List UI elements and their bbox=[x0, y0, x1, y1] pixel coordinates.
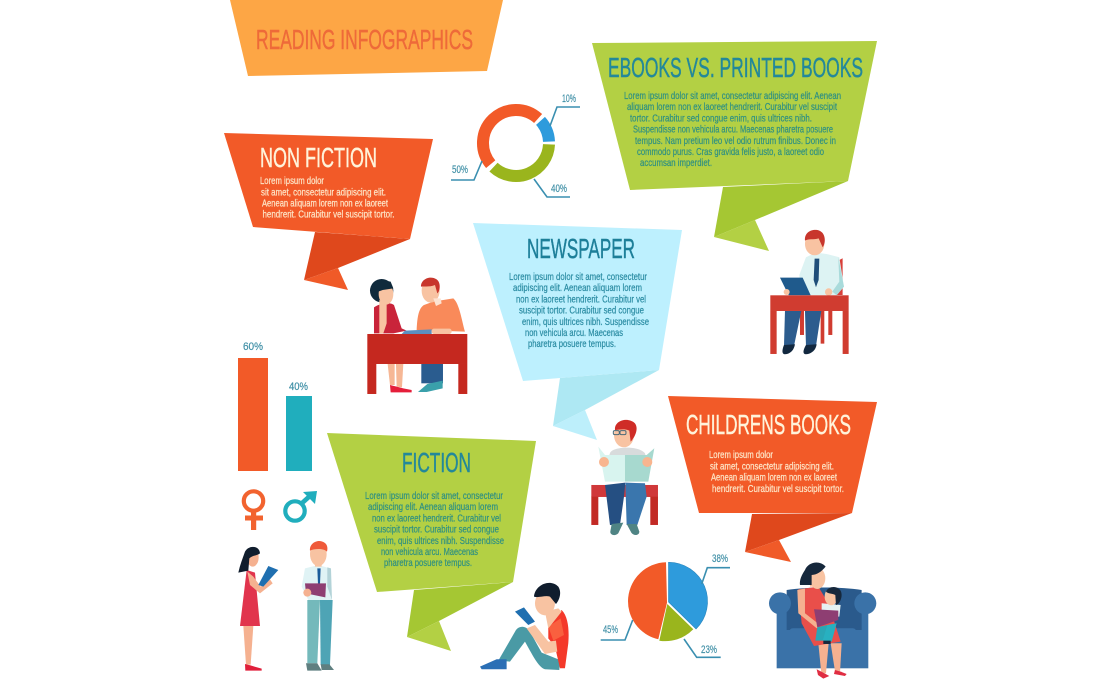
title banner: READING INFOGRAPHICS bbox=[256, 24, 473, 55]
bar chart: gender split: 60% bbox=[243, 341, 263, 353]
panel: childrens books: CHILDRENS BOOKS bbox=[686, 409, 851, 440]
panel: childrens books bbox=[668, 396, 877, 562]
panel: newspaper: enim, quis ultrices nibh. Suspendisse bbox=[522, 317, 649, 328]
panel: ebooks vs printed books bbox=[592, 41, 877, 251]
panel: ebooks vs printed books: aliquam lorem non ex laoreet hendrerit. Curabitur vel suscipit bbox=[627, 102, 837, 113]
figure: man with laptop at desk bbox=[770, 230, 849, 354]
panel: newspaper: non vehicula arcu. Maecenas bbox=[525, 328, 623, 339]
panel: childrens books: hendrerit. Curabitur vel suscipit tortor. bbox=[712, 484, 844, 495]
panel: fiction: suscipit tortor. Curabitur sed congue bbox=[374, 525, 499, 536]
panel: fiction: FICTION bbox=[402, 447, 471, 478]
panel: fiction: Lorem ipsum dolor sit amet, consectetur bbox=[365, 491, 503, 502]
panel: non fiction: hendrerit. Curabitur vel suscipit tortor. bbox=[262, 210, 394, 220]
donut chart: 10% bbox=[562, 93, 576, 105]
bar chart: gender split: 40% bbox=[289, 381, 308, 393]
panel: newspaper: adipiscing elit. Aenean aliquam lorem bbox=[513, 283, 642, 294]
panel: newspaper: non ex laoreet hendrerit. Curabitur vel bbox=[516, 294, 646, 305]
panel: ebooks vs printed books: Lorem ipsum dolor sit amet, consectetur adipiscing elit. Aenean bbox=[624, 91, 841, 102]
pie chart bbox=[601, 553, 730, 657]
donut chart: 50% bbox=[452, 164, 468, 176]
title banner bbox=[230, 0, 503, 76]
panel: childrens books: sit amet, consectetur adipiscing elit. bbox=[710, 462, 834, 472]
figure: woman and man standing with books bbox=[238, 541, 334, 671]
icon: male symbol bbox=[285, 491, 317, 521]
figure: man reading newspaper on bench bbox=[591, 420, 658, 535]
panel: ebooks vs printed books: tortor. Curabitur sed congue enim, quis ultrices nibh. bbox=[630, 113, 812, 124]
panel: fiction: adipiscing elit. Aenean aliquam lorem bbox=[368, 502, 498, 513]
bar chart: gender split bbox=[238, 341, 312, 471]
donut chart bbox=[451, 93, 580, 197]
panel: ebooks vs printed books: tempus. Nam pretium leo vel odio rutrum finibus. Donec in bbox=[635, 136, 836, 147]
panel: newspaper: suscipit tortor. Curabitur sed congue bbox=[519, 306, 644, 317]
panel: ebooks vs printed books: Suspendisse non vehicula arcu. Maecenas pharetra posuere bbox=[633, 125, 833, 136]
icon: female symbol bbox=[244, 491, 263, 530]
panel: ebooks vs printed books: commodo purus. Cras gravida felis justo, a laoreet odio bbox=[637, 147, 824, 158]
panel: newspaper: Lorem ipsum dolor sit amet, consectetur bbox=[509, 272, 647, 283]
panel: fiction: non ex laoreet hendrerit. Curabitur vel bbox=[372, 513, 501, 524]
panel: ebooks vs printed books: EBOOKS VS. PRINTED BOOKS bbox=[608, 52, 863, 83]
panel: newspaper: NEWSPAPER bbox=[527, 233, 635, 264]
panel: non fiction: NON FICTION bbox=[260, 142, 377, 173]
panel: non fiction: Lorem ipsum dolor bbox=[260, 176, 324, 187]
panel: newspaper bbox=[473, 223, 682, 440]
panel: non fiction bbox=[224, 133, 433, 290]
panel: childrens books: Aenean aliquam lorem non ex laoreet bbox=[711, 472, 837, 484]
panel: fiction bbox=[327, 433, 536, 651]
figure: mother reading to child in armchair bbox=[769, 563, 876, 679]
figure: couple reading at table bbox=[367, 278, 467, 394]
panel: childrens books: Lorem ipsum dolor bbox=[709, 450, 773, 461]
donut chart: 40% bbox=[551, 183, 567, 195]
panel: non fiction: sit amet, consectetur adipiscing elit. bbox=[261, 188, 386, 198]
pie chart: 45% bbox=[603, 624, 618, 636]
panel: fiction: pharetra posuere tempus. bbox=[384, 558, 472, 569]
panel: non fiction: Aenean aliquam lorem non ex laoreet bbox=[262, 198, 388, 210]
pie chart: 23% bbox=[701, 644, 717, 656]
figure: man sitting on floor reading bbox=[480, 583, 569, 670]
panel: fiction: non vehicula arcu. Maecenas bbox=[381, 547, 478, 558]
panel: ebooks vs printed books: accumsan imperdiet. bbox=[640, 158, 712, 169]
panel: fiction: enim, quis ultrices nibh. Suspendisse bbox=[377, 536, 504, 547]
panel: newspaper: pharetra posuere tempus. bbox=[528, 339, 616, 350]
pie chart: 38% bbox=[712, 553, 728, 565]
